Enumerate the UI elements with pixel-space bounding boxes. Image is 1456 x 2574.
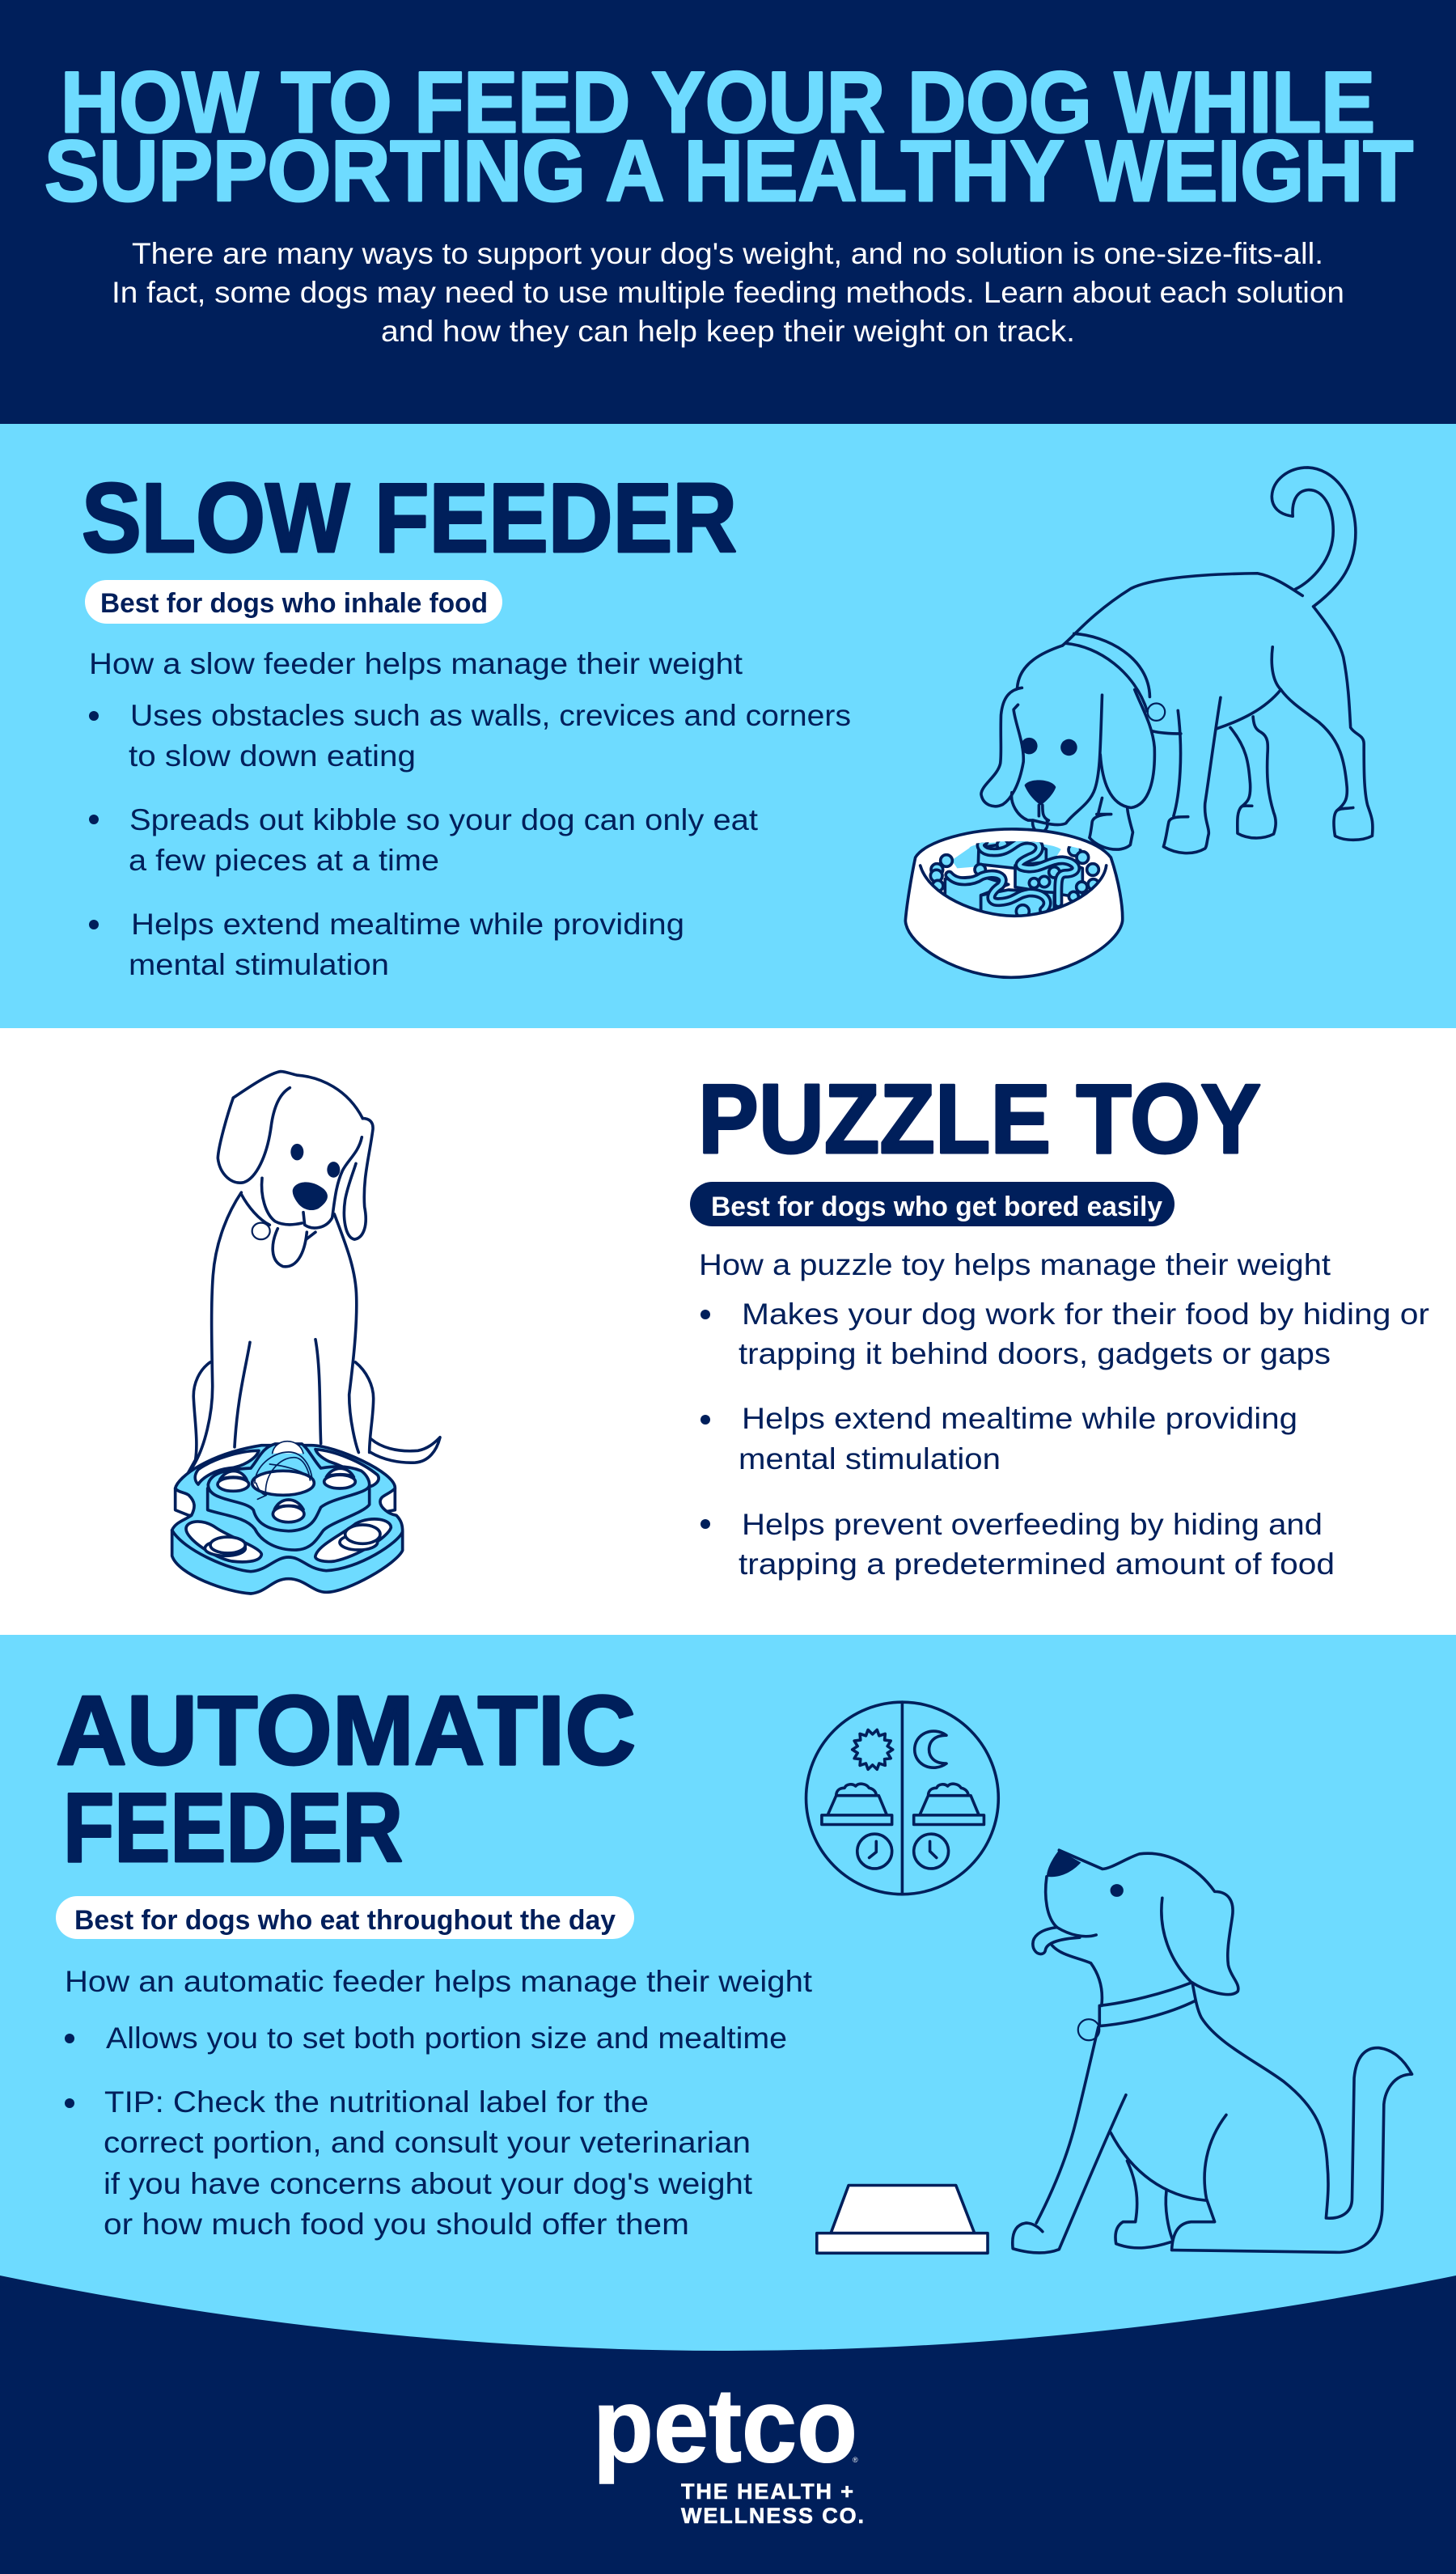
icon: moon — [915, 1731, 946, 1768]
icon: evening food bowl — [914, 1784, 984, 1825]
automatic feeder text block: How an automatic feeder helps manage their weight — [65, 1965, 813, 1998]
icon: sun — [853, 1729, 893, 1769]
panel: footer — [0, 2276, 1456, 2574]
automatic feeder text block: TIP: Check the nutritional label for the — [104, 2085, 649, 2119]
logo tagline: WELLNESS CO. — [681, 2504, 864, 2528]
intro text — [112, 237, 1344, 348]
intro text: There are many ways to support your dog's weight, and no solution is one-size-fits-all. — [132, 237, 1323, 270]
logo tagline — [681, 2479, 864, 2528]
puzzle toy text block: Helps prevent overfeeding by hiding and — [742, 1508, 1323, 1541]
badge: best for dogs who inhale food — [85, 580, 502, 624]
illustration: slow feeder bowl — [905, 829, 1123, 977]
slow feeder text block — [89, 647, 851, 981]
illustration: dog eating — [981, 468, 1373, 853]
icon: morning food bowl — [822, 1784, 892, 1825]
heading: automatic feeder: AUTOMATIC — [56, 1675, 636, 1785]
slow feeder text block: Helps extend mealtime while providing — [131, 908, 684, 941]
intro text: and how they can help keep their weight on track. — [381, 315, 1075, 348]
puzzle toy text block — [699, 1248, 1429, 1581]
heading: automatic feeder: FEEDER — [63, 1772, 403, 1882]
puzzle toy text block: Helps extend mealtime while providing — [742, 1402, 1297, 1435]
illustration: dog looking up — [1013, 1850, 1412, 2253]
title: SUPPORTING A HEALTHY WEIGHT — [44, 122, 1413, 219]
slow feeder text block: mental stimulation — [129, 948, 389, 981]
slow feeder text block: to slow down eating — [129, 739, 416, 773]
slow feeder text block: a few pieces at a time — [129, 844, 439, 877]
puzzle toy text block: How a puzzle toy helps manage their weight — [699, 1248, 1331, 1281]
logo: petco: ® — [853, 2456, 858, 2464]
slow feeder text block: How a slow feeder helps manage their weight — [89, 647, 743, 680]
automatic feeder text block: correct portion, and consult your veterinarian — [104, 2126, 751, 2159]
badge: best for dogs who get bored easily: Best for dogs who get bored easily — [711, 1192, 1162, 1222]
puzzle toy text block: trapping it behind doors, gadgets or gaps — [739, 1337, 1331, 1370]
automatic feeder text block: Allows you to set both portion size and mealtime — [106, 2022, 787, 2055]
heading: slow feeder: SLOW FEEDER — [82, 463, 737, 573]
illustration: floor food bowl — [817, 2186, 988, 2253]
badge: best for dogs who eat throughout the day: Best for dogs who eat throughout the day — [74, 1905, 616, 1936]
heading: automatic feeder — [56, 1675, 636, 1882]
title: HOW TO FEED YOUR DOG WHILE — [61, 53, 1375, 150]
slow feeder text block: Uses obstacles such as walls, crevices and corners — [130, 699, 851, 732]
logo tagline: THE HEALTH + — [681, 2479, 853, 2504]
icon: day and night feeding schedule — [806, 1702, 998, 1895]
illustration: sitting dog — [188, 1072, 440, 1474]
badge: best for dogs who inhale food: Best for dogs who inhale food — [100, 588, 488, 619]
intro text: In fact, some dogs may need to use multiple feeding methods. Learn about each solution — [112, 276, 1344, 309]
puzzle toy text block: trapping a predetermined amount of food — [739, 1547, 1335, 1581]
illustration: puzzle toy tray — [172, 1442, 403, 1594]
automatic feeder text block: if you have concerns about your dog's weight — [104, 2167, 753, 2200]
automatic feeder text block: or how much food you should offer them — [104, 2208, 689, 2241]
panel: slow feeder — [0, 424, 1456, 1028]
panel: header — [0, 0, 1456, 424]
title — [44, 53, 1413, 219]
badge: best for dogs who get bored easily — [690, 1182, 1175, 1226]
panel: puzzle toy — [0, 1028, 1456, 1635]
slow feeder text block: Spreads out kibble so your dog can only eat — [129, 803, 759, 836]
badge: best for dogs who eat throughout the day — [56, 1896, 634, 1939]
logo: petco: petco — [593, 2366, 857, 2484]
panel: automatic feeder — [0, 1635, 1456, 2363]
icon: evening clock — [914, 1834, 949, 1869]
puzzle toy text block: mental stimulation — [739, 1442, 1001, 1475]
heading: puzzle toy: PUZZLE TOY — [698, 1064, 1261, 1174]
automatic feeder text block — [65, 1965, 813, 2241]
puzzle toy text block: Makes your dog work for their food by hiding or — [742, 1298, 1429, 1331]
icon: morning clock — [857, 1834, 892, 1869]
